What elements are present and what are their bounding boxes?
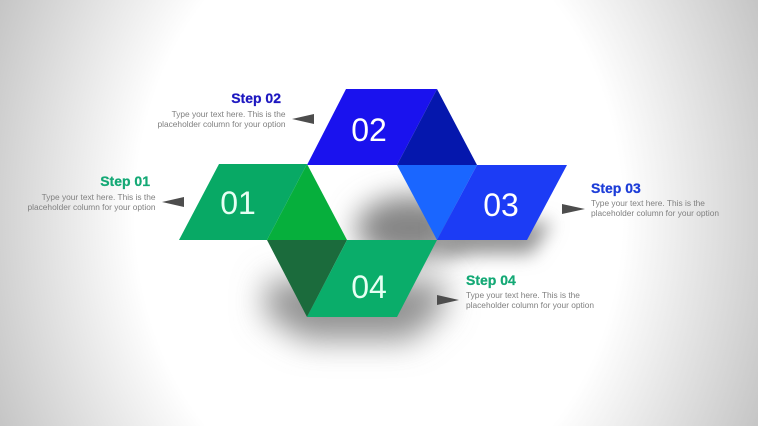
description: step 02: placeholder column for your option: [157, 119, 286, 129]
description: step 03: placeholder column for your option: [591, 208, 719, 218]
shadow: bottom: [264, 280, 446, 340]
shadow: right: [440, 222, 552, 254]
text block: step 02: [157, 90, 286, 129]
triangle 02: [397, 89, 477, 165]
heading: step 02: Step 02: [231, 90, 281, 106]
triangle 01: [267, 164, 347, 240]
number 03: 03: [483, 187, 519, 223]
number 02: 02: [351, 112, 387, 148]
parallelogram 03: [437, 165, 567, 240]
shape 01: green: [179, 164, 347, 240]
description: step 02: Type your text here. This is the: [172, 109, 286, 119]
text block: step 01: [27, 173, 156, 212]
description: step 04: Type your text here. This is the: [466, 290, 580, 300]
heading: step 04: Step 04: [466, 272, 516, 288]
shadow: centre: [356, 196, 464, 260]
description: step 01: Type your text here. This is the: [42, 192, 156, 202]
triangle 03: [397, 165, 477, 240]
shape 02: blue: [307, 89, 477, 165]
shape 04: green: [267, 240, 437, 317]
parallelogram 04: [307, 240, 437, 317]
description: step 03: Type your text here. This is the: [591, 198, 705, 208]
description: step 04: placeholder column for your option: [466, 300, 594, 310]
arrow: step 01: [162, 197, 184, 207]
text block: step 03: [591, 180, 719, 218]
arrow: step 02: [292, 114, 314, 124]
parallelogram 02: [307, 89, 437, 165]
number 01: 01: [220, 185, 256, 221]
heading: step 03: Step 03: [591, 180, 641, 196]
arrow: step 03: [562, 204, 585, 214]
arrow: step 04: [437, 295, 459, 305]
heading: step 01: Step 01: [100, 173, 150, 189]
parallelogram 01: [179, 164, 307, 240]
number 04: 04: [351, 269, 387, 305]
shape 03: blue: [397, 165, 567, 240]
text block: step 04: [466, 272, 594, 310]
triangle 04: [267, 240, 347, 317]
description: step 01: placeholder column for your option: [27, 202, 156, 212]
